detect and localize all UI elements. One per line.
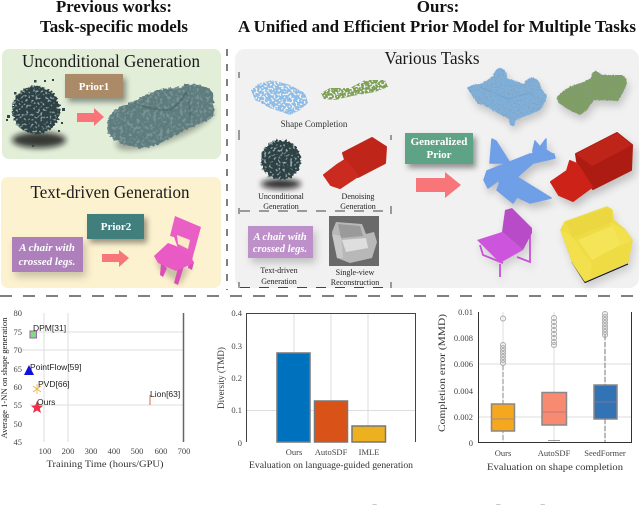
y axis label: Diversity (TMD) [216, 347, 226, 409]
bar labels: IMLE [359, 447, 379, 457]
marker: Ours [31, 397, 55, 413]
partial blue shape [251, 80, 308, 115]
heading: previous works: Task-specific models [40, 17, 188, 36]
y axis ticks: 0.1 [231, 405, 242, 415]
arrow [102, 250, 129, 267]
dashed task frames [239, 72, 391, 288]
category labels: AutoSDF [538, 448, 571, 458]
arrow [416, 172, 461, 198]
vertical dashed divider [226, 49, 228, 290]
label: denoising generation [340, 192, 376, 211]
label: single-view reconstruction [331, 268, 379, 287]
y axis ticks: 45 [14, 437, 22, 447]
armchair photo [329, 216, 379, 266]
bar labels: AutoSDF [315, 447, 348, 457]
label: single-view reconstruction: Single-view [336, 268, 375, 277]
generalized prior box: Generalized [411, 136, 467, 148]
y axis ticks: 0 [238, 438, 242, 448]
text prompt box: crossed legs. [253, 244, 307, 255]
text prompt box [12, 237, 83, 272]
y axis ticks: 70 [14, 345, 22, 355]
x axis ticks: 500 [131, 446, 143, 456]
label: denoising generation: Denoising [342, 192, 374, 201]
label: text-driven generation: Generation [261, 277, 297, 286]
marker: PVD [33, 379, 70, 394]
panel title: various tasks: Various Tasks [384, 48, 480, 68]
x axis ticks: 100 [39, 446, 51, 456]
panel title: unconditional generation: Unconditional Generation [22, 51, 200, 71]
grid lines [246, 313, 415, 442]
y axis ticks: 0.2 [231, 373, 242, 383]
category labels: Ours [495, 448, 511, 458]
y axis label: Completion error (MMD) [437, 314, 447, 432]
marker: PointFlow [24, 362, 82, 375]
prior2 box [87, 214, 144, 239]
marker: Lion: Lion[63] [150, 389, 180, 399]
marker: Lion [150, 389, 180, 405]
box: SeedFormer [594, 312, 617, 442]
box: Ours [491, 316, 515, 441]
bar: AutoSDF [314, 401, 348, 442]
panel: various tasks [235, 48, 639, 288]
panel: text-driven generation [1, 177, 221, 288]
small point cloud ball [261, 140, 301, 189]
text prompt box [248, 226, 313, 258]
marker: PVD: PVD[66] [38, 379, 70, 389]
panel title: text-driven generation: Text-driven Generation [30, 182, 190, 202]
y axis ticks: 0.01 [458, 307, 473, 317]
grid lines [22, 313, 183, 442]
label: denoising generation: Generation [340, 202, 376, 211]
panel: unconditional generation [2, 49, 221, 159]
y axis ticks: 65 [14, 364, 22, 374]
x axis label: Evaluation on language-guided generation [249, 460, 414, 470]
x axis ticks: 300 [85, 446, 97, 456]
horizontal dashed divider [0, 295, 640, 297]
y axis ticks: 55 [14, 400, 22, 410]
y axis ticks: 0.002 [454, 412, 473, 422]
partial green shape [321, 80, 388, 100]
y axis ticks [454, 307, 474, 448]
label: single-view reconstruction: Reconstruction [331, 278, 379, 287]
label: unconditional generation [258, 192, 305, 211]
grid lines [478, 312, 631, 442]
point cloud car [108, 84, 219, 159]
y axis ticks: 50 [14, 419, 22, 429]
label: text-driven generation: Text-driven [260, 266, 298, 275]
x axis label: Training Time (hours/GPU) [46, 459, 164, 469]
heading: ours: A Unified and Efficient Prior Model for Multiple Tasks [238, 17, 636, 36]
y axis ticks: 0.4 [231, 308, 243, 318]
x axis ticks [39, 446, 190, 456]
y axis ticks: 0.004 [454, 386, 474, 396]
y axis ticks: 80 [14, 308, 22, 318]
y axis ticks [14, 308, 22, 447]
text prompt box: A chair with [252, 232, 307, 243]
generalized prior box [405, 133, 473, 164]
marker: DPM [30, 323, 66, 338]
yellow armchair [561, 207, 632, 282]
right axis [182, 313, 184, 442]
prior2 box: Prior2 [101, 221, 132, 233]
label: unconditional generation: Generation [263, 202, 299, 211]
x axis ticks: 400 [108, 446, 120, 456]
x axis ticks: 600 [155, 446, 167, 456]
y axis label: Average 1-NN on shape generation [0, 318, 9, 438]
bar: IMLE [352, 426, 386, 442]
heading: ours [238, 0, 636, 36]
chart: completion box plot [437, 307, 632, 472]
blue airplane [484, 139, 555, 203]
pink chair [154, 216, 201, 285]
small noisy red truck [324, 138, 386, 188]
x axis ticks: 200 [62, 446, 74, 456]
text prompt box: A chair with [18, 242, 75, 254]
bar labels [286, 447, 379, 457]
point cloud ball [6, 79, 66, 148]
big red truck [551, 133, 632, 201]
heading: previous works [40, 0, 188, 36]
y axis ticks: 75 [14, 327, 22, 337]
label: shape completion: Shape Completion [281, 119, 348, 129]
big green car [557, 71, 627, 115]
y axis ticks [231, 308, 243, 448]
magenta chair [477, 208, 532, 277]
axes [246, 314, 416, 442]
prior1 box [65, 74, 123, 98]
box: AutoSDF [542, 316, 567, 440]
marker: DPM: DPM[31] [33, 323, 66, 333]
big blue sofa [467, 68, 547, 126]
y axis ticks: 60 [14, 382, 22, 392]
axes [478, 312, 632, 442]
x axis ticks: 700 [178, 446, 190, 456]
y axis ticks: 0.006 [454, 359, 473, 369]
generalized prior box: Prior [426, 149, 452, 161]
category labels: SeedFormer [584, 448, 626, 458]
y axis ticks: 0 [469, 438, 473, 448]
y axis ticks: 0.3 [231, 341, 242, 351]
text prompt box: crossed legs. [19, 256, 75, 268]
chart: diversity bars [216, 308, 416, 470]
marker: Ours: Ours [37, 397, 55, 407]
bar: Ours [277, 353, 310, 442]
label: unconditional generation: Unconditional [258, 192, 305, 201]
category labels [495, 448, 626, 458]
chart: training time scatter [0, 308, 190, 469]
label: text-driven generation [260, 266, 298, 286]
x axis label: Evaluation on shape completion [487, 462, 624, 472]
y axis ticks: 0.008 [454, 333, 473, 343]
arrow [77, 108, 104, 126]
prior1 box: Prior1 [79, 81, 109, 93]
marker: PointFlow: PointFlow[59] [30, 362, 82, 372]
bar labels: Ours [286, 447, 302, 457]
